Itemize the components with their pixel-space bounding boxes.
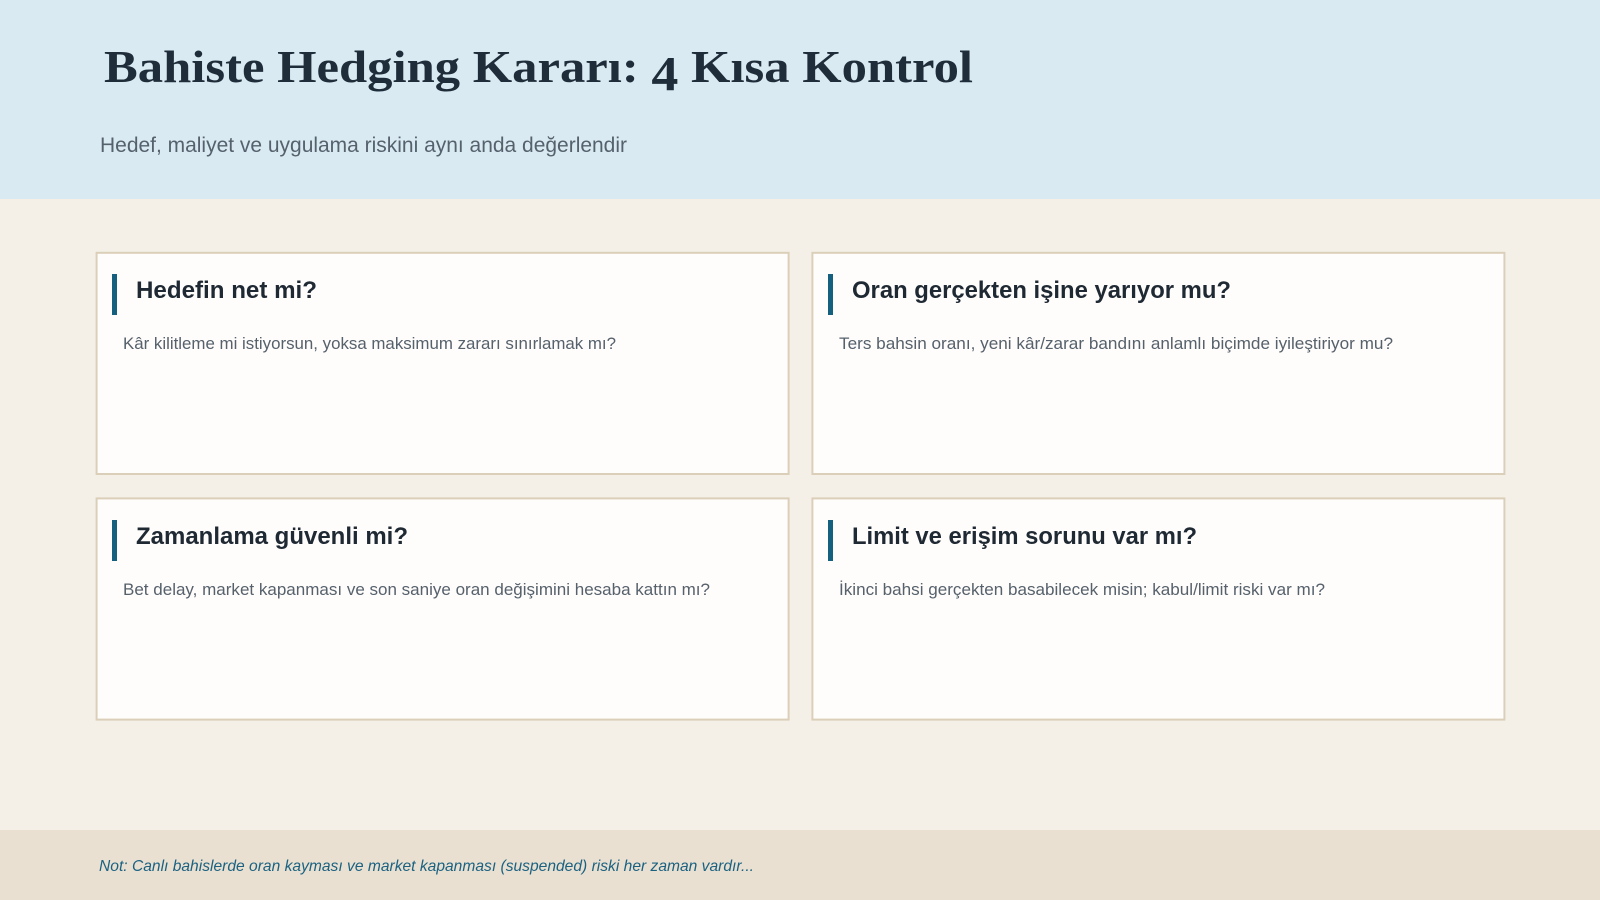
body text: Ters bahsin oranı, yeni kâr/zarar bandını anlamlı biçimde iyileştiriyor mu?: [839, 334, 1393, 353]
accent bar: [828, 274, 833, 315]
body text: Kâr kilitleme mi istiyorsun, yoksa maksimum zararı sınırlamak mı?: [123, 334, 616, 353]
footer band: [0, 830, 1600, 900]
title: Kısa Kontrol: [678, 41, 973, 92]
accent bar: [828, 520, 833, 561]
subtitle: Hedef, maliyet ve uygulama riskini aynı anda değerlendir: [100, 134, 627, 157]
heading: Limit ve erişim sorunu var mı?: [852, 523, 1197, 550]
panel: zamanlama güvenli mi: [97, 498, 789, 720]
header band: [0, 0, 1600, 199]
heading: Zamanlama güvenli mi?: [136, 523, 408, 550]
panel: limit ve erişim sorunu: [812, 498, 1504, 720]
heading: Hedefin net mi?: [136, 277, 317, 304]
title: Bahiste Hedging Kararı:: [104, 41, 590, 92]
body text: İkinci bahsi gerçekten basabilecek misin; kabul/limit riski var mı?: [839, 580, 1325, 599]
title: 4: [651, 46, 678, 101]
heading: Oran gerçekten işine yarıyor mu?: [852, 277, 1231, 304]
panel: hedefin net mi: [97, 253, 789, 474]
footnote: Not: Canlı bahislerde oran kayması ve market kapanması (suspended) riski her zaman vardır...: [99, 858, 754, 875]
body text: Bet delay, market kapanması ve son saniye oran değişimini hesaba kattın mı?: [123, 580, 710, 599]
accent bar: [112, 520, 117, 561]
panel: oran işine yarıyor mu: [812, 253, 1504, 474]
accent bar: [112, 274, 117, 315]
